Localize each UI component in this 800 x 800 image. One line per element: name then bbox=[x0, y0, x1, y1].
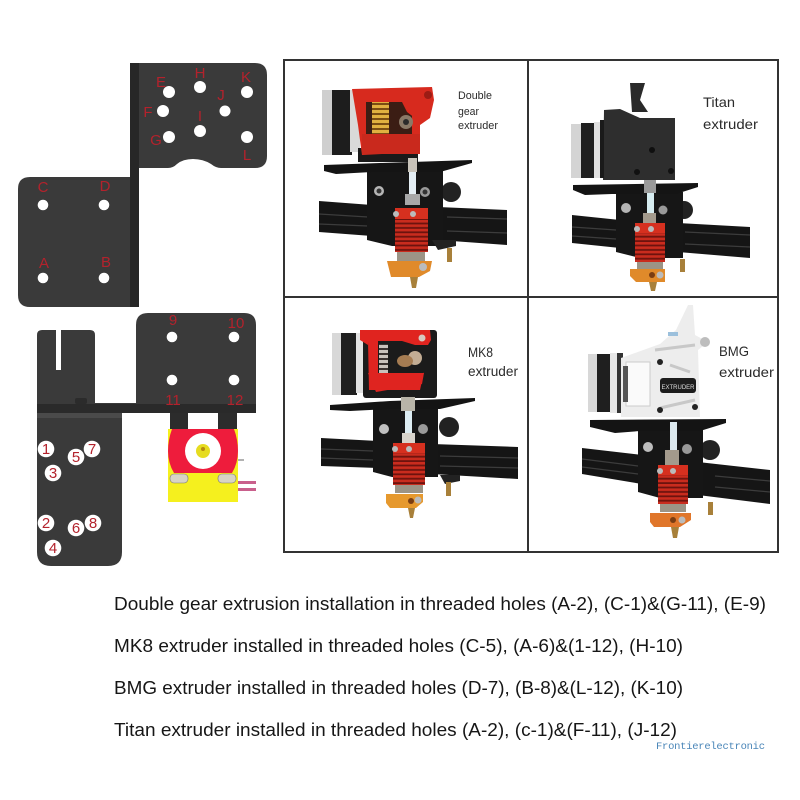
illustration: mounting plate bbox=[324, 160, 472, 174]
panel: lower bracket with holes 1-12: 5 bbox=[72, 449, 80, 466]
illustration: rail bbox=[321, 438, 518, 479]
panel: double gear extruder bbox=[319, 87, 507, 288]
panel: lower bracket with holes 1-12: 11 bbox=[165, 392, 181, 409]
panel: lower bracket with holes 1-12: 3 bbox=[49, 465, 57, 482]
text block: installation instructions bbox=[114, 594, 766, 740]
label: titan extruder: Titan bbox=[703, 94, 735, 110]
panel: lower bracket with holes 1-12: 7 bbox=[88, 441, 96, 458]
panel: upper L bracket with holes A-L bbox=[18, 63, 267, 307]
illustration: MK8 red extruder body bbox=[360, 330, 437, 398]
illustration: filament tube bbox=[665, 422, 679, 466]
illustration: red dual gear extruder body bbox=[352, 87, 434, 155]
panel: upper L bracket with holes A-L: H bbox=[195, 65, 205, 82]
illustration: heater block and nozzles bbox=[630, 259, 685, 291]
panel: MK8 extruder bbox=[321, 330, 519, 518]
panel: upper L bracket with holes A-L: F bbox=[143, 104, 153, 121]
label: double gear extruder: Double bbox=[458, 90, 492, 102]
illustration: heatsink bbox=[634, 223, 665, 269]
panel: lower bracket with holes 1-12: 1 bbox=[42, 441, 50, 458]
panel: lower bracket with holes 1-12 bbox=[37, 312, 256, 566]
illustration: mounting plate bbox=[330, 398, 475, 411]
panel: titan extruder bbox=[571, 83, 758, 291]
panel: upper L bracket with holes A-L: K bbox=[241, 69, 251, 86]
panel: BMG extruder bbox=[582, 305, 774, 538]
label: BMG extruder: BMG bbox=[719, 343, 749, 359]
illustration: stepper motor bbox=[571, 122, 602, 178]
illustration: clear BMG extruder body bbox=[621, 305, 710, 417]
illustration: filament tube bbox=[401, 397, 415, 443]
panel: lower bracket with holes 1-12: 12 bbox=[227, 392, 243, 409]
panel: upper L bracket with holes A-L: B bbox=[101, 254, 111, 271]
panel: lower bracket with holes 1-12: 9 bbox=[169, 312, 177, 329]
label: MK8 extruder bbox=[468, 345, 519, 379]
illustration: mounting plate bbox=[573, 183, 698, 195]
panel: lower bracket with holes 1-12: 6 bbox=[72, 520, 80, 537]
illustration: heater block and nozzles bbox=[650, 502, 713, 538]
text block: installation instructions: Titan extruder installed in threaded holes (A-2), (c-1)&(F-11), (J-12) bbox=[114, 720, 677, 740]
illustration: heater block and nozzles bbox=[386, 482, 451, 518]
illustration: mounting plate bbox=[590, 419, 726, 433]
illustration: rail bbox=[582, 448, 770, 504]
illustration: heatsink bbox=[393, 208, 428, 261]
panel: extruder photo grid frame bbox=[284, 60, 778, 552]
illustration: stepper motor bbox=[322, 90, 418, 162]
illustration: heater block and nozzles bbox=[387, 248, 452, 288]
illustration: heatsink bbox=[657, 465, 688, 512]
label: double gear extruder bbox=[458, 90, 498, 132]
panel: lower bracket with holes 1-12: 4 bbox=[49, 540, 57, 557]
illustration: rail bbox=[572, 215, 750, 258]
illustration: carriage and wheel bbox=[616, 192, 693, 258]
label: MK8 extruder: MK8 bbox=[468, 345, 493, 360]
illustration: carriage and wheel bbox=[367, 170, 461, 250]
text block: installation instructions: Double gear extrusion installation in threaded holes (A-2), (C-1)&(G-11), (E-9) bbox=[114, 594, 766, 614]
illustration: filament tube bbox=[643, 180, 656, 224]
label: MK8 extruder: extruder bbox=[468, 364, 519, 379]
icon: hot end top view diagram bbox=[168, 413, 256, 502]
label: double gear extruder: gear bbox=[458, 106, 479, 118]
label: BMG extruder bbox=[719, 343, 774, 380]
panel: upper L bracket with holes A-L: L bbox=[243, 147, 251, 164]
illustration: carriage and wheel bbox=[638, 428, 720, 498]
illustration: clear BMG extruder body: EXTRUDER bbox=[661, 385, 695, 391]
illustration: rail bbox=[319, 201, 507, 245]
panel: upper L bracket with holes A-L: D bbox=[100, 178, 111, 195]
illustration: stepper motor bbox=[588, 353, 623, 413]
panel: lower bracket with holes 1-12: 2 bbox=[42, 515, 50, 532]
text block: installation instructions: MK8 extruder installed in threaded holes (C-5), (A-6)&(1-12), (H-10) bbox=[114, 636, 683, 656]
panel: lower bracket with holes 1-12: 10 bbox=[228, 315, 244, 332]
label: titan extruder bbox=[703, 94, 758, 132]
illustration: filament tube bbox=[405, 158, 420, 205]
panel: upper L bracket with holes A-L: G bbox=[150, 132, 162, 149]
panel: upper L bracket with holes A-L: C bbox=[38, 179, 49, 196]
panel: upper L bracket with holes A-L: E bbox=[156, 74, 166, 91]
text block: installation instructions: BMG extruder installed in threaded holes (D-7), (B-8)&(L-12), (K-10) bbox=[114, 678, 683, 698]
panel: upper L bracket with holes A-L: A bbox=[39, 255, 49, 272]
illustration: stepper motor bbox=[332, 333, 364, 395]
label: titan extruder: extruder bbox=[703, 116, 758, 132]
panel: upper L bracket with holes A-L: I bbox=[198, 108, 202, 125]
panel: lower bracket with holes 1-12: 8 bbox=[89, 515, 97, 532]
label: BMG extruder: extruder bbox=[719, 364, 774, 380]
illustration: titan extruder body bbox=[600, 83, 675, 180]
label: double gear extruder: extruder bbox=[458, 120, 498, 132]
illustration: carriage and wheel bbox=[373, 408, 460, 484]
watermark: Frontierelectronic bbox=[656, 741, 765, 753]
panel: upper L bracket with holes A-L: J bbox=[217, 87, 225, 104]
illustration: heatsink bbox=[392, 443, 425, 493]
